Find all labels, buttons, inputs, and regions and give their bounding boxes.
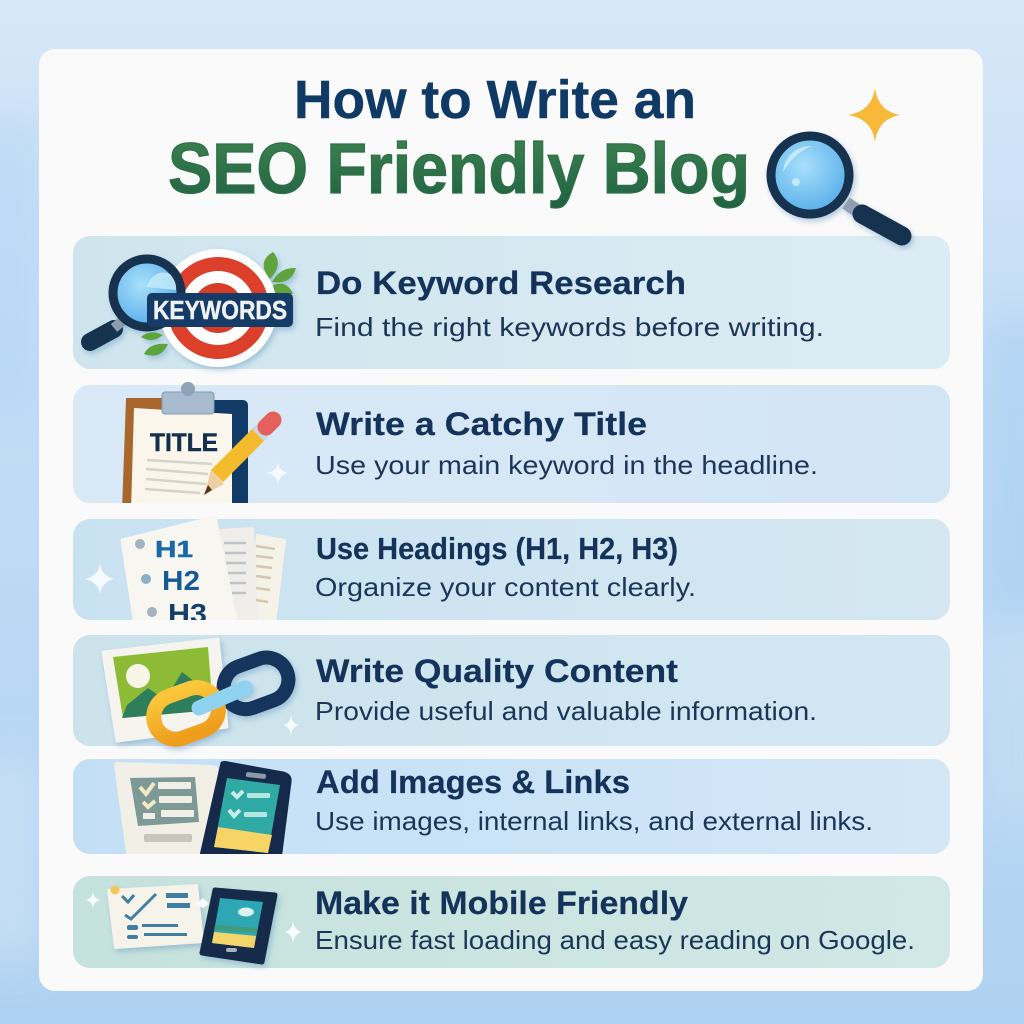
step heading: Add Images & Links (316, 764, 630, 800)
icon: keywords target and magnifier (90, 249, 296, 367)
step heading: Write Quality Content (316, 653, 678, 689)
icon: checklist and tablet (108, 885, 275, 962)
icon: sparkle (283, 715, 299, 735)
panel: use headings (73, 517, 950, 629)
step heading: Write a Catchy Title (316, 406, 647, 442)
step description: Provide useful and valuable information. (315, 696, 817, 726)
icon: heading pages: H3 (168, 598, 207, 629)
step heading: Do Keyword Research (316, 265, 686, 301)
title line 1: How to Write an (294, 70, 696, 130)
icon: image and chain link (103, 639, 295, 745)
step description: Use your main keyword in the headline. (315, 450, 818, 480)
step heading: Use Headings (H1, H2, H3) (316, 531, 678, 566)
icon: document and phone (115, 762, 290, 860)
panel: do keyword research (73, 236, 950, 369)
step description: Organize your content clearly. (315, 572, 696, 602)
panel: write quality content (73, 635, 950, 746)
step heading: Make it Mobile Friendly (315, 885, 688, 921)
icon: keywords target and magnifier: KEYWORDS (153, 295, 287, 325)
icon: heading pages (122, 517, 285, 629)
step description: Find the right keywords before writing. (315, 312, 824, 342)
step description: Use images, internal links, and external links. (315, 806, 873, 836)
title line 2: SEO Friendly Blog (168, 130, 750, 209)
title (168, 70, 750, 209)
icon: heading pages: H2 (162, 565, 200, 596)
icon: clipboard and pencil: TITLE (150, 429, 218, 457)
panel: make it mobile friendly (73, 876, 950, 968)
panel: add images and links (73, 759, 950, 860)
icon: sparkles (85, 892, 302, 943)
icon: sparkle (85, 564, 114, 594)
icon: sparkle (267, 462, 288, 484)
icon: heading pages: H1 (155, 536, 193, 562)
step description: Ensure fast loading and easy reading on Google. (315, 925, 915, 955)
panel: write a catchy title (73, 382, 950, 510)
icon: clipboard and pencil (123, 382, 273, 510)
icon: large magnifying glass (771, 136, 902, 236)
icon: gold sparkle (848, 88, 900, 142)
